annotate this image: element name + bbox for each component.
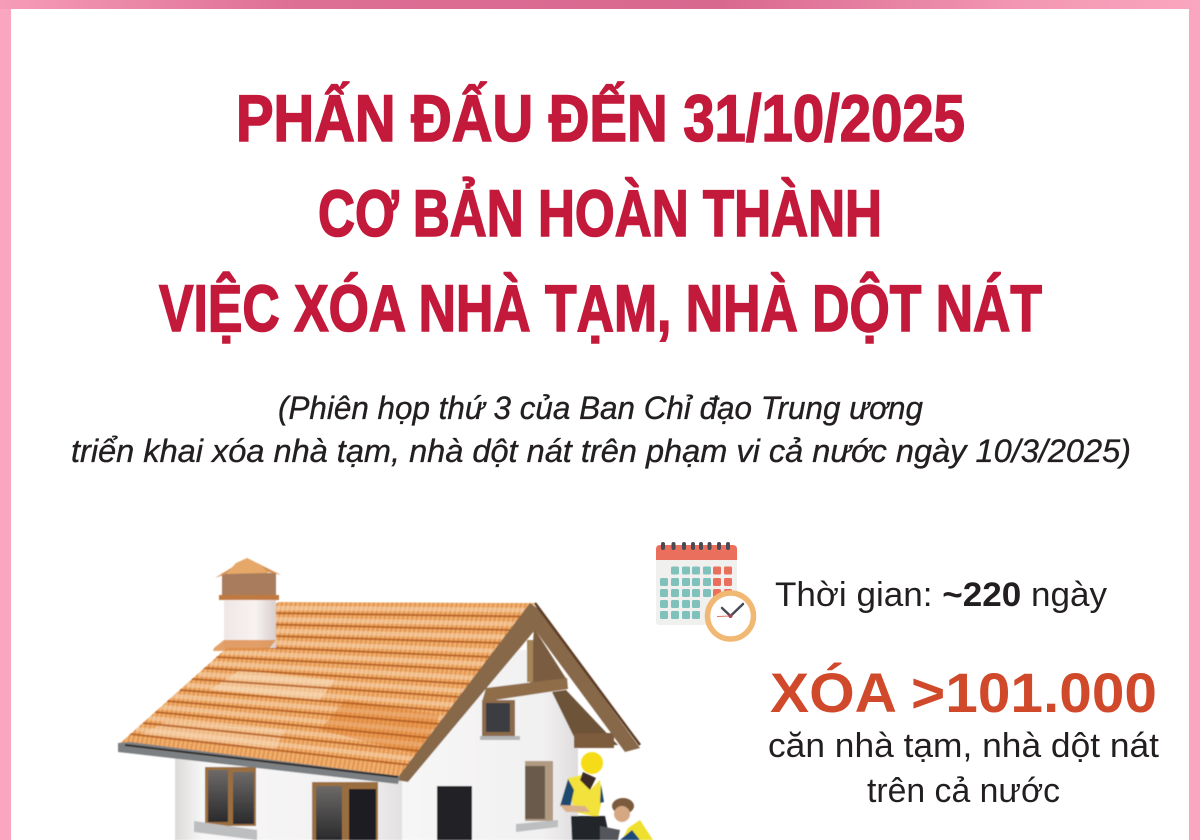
key figure description: căn nhà tạm, nhà dột nát [768,727,1160,765]
title [159,81,1042,345]
left window [194,767,257,840]
gable wall [402,650,578,840]
subtitle [71,390,1131,469]
roof bargeboard [396,603,640,782]
front wall [175,755,402,840]
worker standing [560,752,610,840]
subtitle: triển khai xóa nhà tạm, nhà dột nát trên phạm vi cả nước ngày 10/3/2025) [71,433,1131,469]
icon: calendar and clock [656,542,754,639]
worker kneeling [600,798,653,840]
subtitle: (Phiên họp thứ 3 của Ban Chỉ đạo Trung ương [278,390,923,426]
key figure description: trên cả nước [867,772,1060,810]
right window [516,761,558,832]
key figure: XÓA >101.000 [770,661,1157,724]
middle window [312,782,378,840]
title: CƠ BẢN HOÀN THÀNH [318,176,882,250]
title: PHẤN ĐẤU ĐẾN 31/10/2025 [236,81,965,155]
house illustration [118,558,653,840]
tiled roof [118,602,535,780]
time label: Thời gian: ~220 ngày [775,576,1107,614]
gutter [118,742,400,784]
chimney [213,558,281,651]
upper window [480,700,520,740]
door [437,786,472,840]
gable timbers [482,628,618,748]
key figure description [768,727,1160,810]
